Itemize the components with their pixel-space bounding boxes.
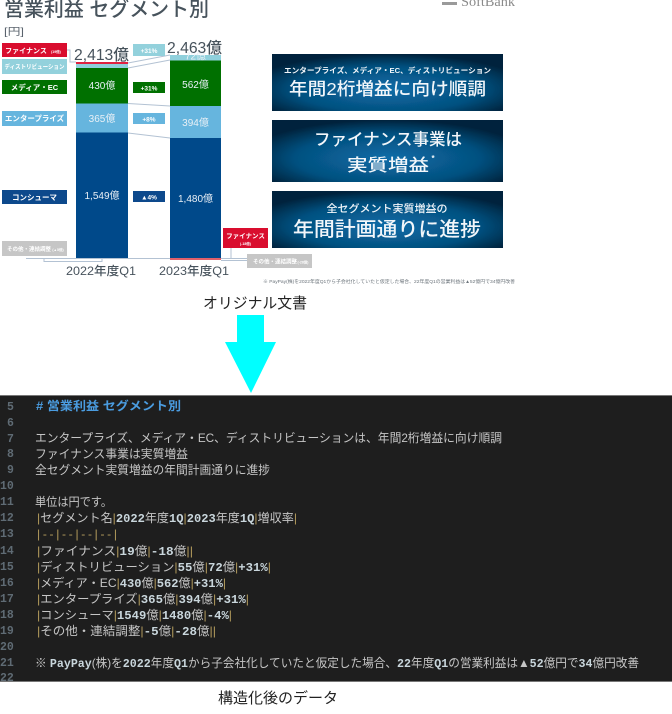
stacked bar: 2022 Q1: 430億	[89, 79, 115, 92]
line numbers: 16	[0, 577, 14, 590]
footnote: ※ PayPay(株)を2022年度Q1から子会社化していたと仮定した場合、22年度Q1の営業利益は▲52億円で34億円改善	[263, 278, 515, 285]
badge: consumer -4%: ▲4%	[141, 194, 157, 202]
banner: finance: *	[431, 154, 435, 163]
markdown table	[37, 510, 297, 639]
line numbers: 21	[0, 657, 14, 670]
stacked bar: 2023 Q1	[170, 50, 221, 260]
banner: finance	[272, 120, 503, 182]
caption: original document: オリジナル文書	[203, 295, 307, 312]
line numbers	[0, 401, 14, 685]
label: media EC	[2, 80, 67, 94]
label: other 2023: その他・連結調整	[253, 258, 297, 266]
change badges	[133, 44, 165, 202]
line numbers: 11	[0, 496, 14, 509]
badge: media +31%	[133, 82, 165, 93]
summary lines: エンタープライズ、メディア・EC、ディストリビューションは、年間2桁増益に向け順調	[35, 430, 502, 445]
markdown table: |その他・連結調整 |-5億|-28億||	[37, 624, 216, 639]
unit note: 単位は円です。	[35, 495, 112, 509]
line numbers: 13	[0, 528, 14, 541]
label: finance: ファイナンス	[5, 47, 47, 55]
label: other	[2, 241, 67, 256]
line numbers: 17	[0, 593, 14, 606]
label: enterprise: エンタープライズ	[5, 113, 65, 123]
label: finance	[2, 43, 67, 57]
line numbers: 5	[7, 401, 14, 414]
banner: on plan: 年間計画通りに進捗	[293, 218, 481, 241]
caption: structured data: 構造化後のデータ	[218, 689, 338, 707]
stacked bar: 2022 Q1	[76, 62, 128, 258]
line numbers: 10	[0, 480, 14, 493]
stacked bar: 2023 Q1: 562億	[182, 78, 209, 91]
line numbers: 19	[0, 625, 14, 638]
markdown table: |コンシューマ|1549億|1480億|-4%|	[37, 608, 232, 623]
code editor panel	[0, 395, 672, 685]
banner: on plan	[272, 191, 503, 248]
label: media EC: メディア・EC	[11, 82, 59, 92]
year labels: 2022年度Q1	[66, 263, 136, 278]
label: finance 2023: ファイナンス	[226, 232, 265, 240]
badge: distribution +31%: +31%	[141, 48, 158, 55]
banner: double-digit growth	[272, 54, 503, 111]
line numbers: 9	[7, 464, 14, 477]
year labels	[66, 263, 229, 278]
label: consumer	[2, 190, 67, 204]
line numbers: 6	[7, 417, 14, 430]
badge: enterprise +8%: +8%	[142, 116, 156, 124]
banner: finance: ファイナンス事業は	[314, 130, 462, 149]
markdown table: |メディア・EC|430億|562億|+31%|	[37, 575, 226, 591]
total 2023: 2,463億	[167, 39, 222, 57]
markdown table: |ファイナンス |19億|-18億||	[37, 544, 193, 559]
label: finance 2023	[223, 228, 268, 248]
label: distribution: ディストリビューション	[4, 63, 64, 71]
code heading: # 営業利益 セグメント別	[36, 398, 181, 413]
segment labels	[2, 43, 67, 256]
banner: finance: 実質増益	[347, 156, 429, 175]
label: other: その他・連結調整	[7, 245, 51, 253]
stacked bar: 2022 Q1: 365億	[89, 112, 115, 125]
original slide	[2, 0, 515, 285]
label: finance: (19億)	[51, 49, 61, 54]
badge: consumer -4%	[133, 191, 165, 202]
year labels: 2023年度Q1	[159, 263, 229, 278]
markdown table: |--|--|--|--|	[37, 527, 117, 541]
markdown table: |エンタープライズ|365億|394億|+31%|	[37, 591, 249, 607]
label: distribution	[2, 59, 67, 74]
label: enterprise	[2, 111, 67, 126]
label: other 2023	[247, 254, 312, 268]
banner: double-digit growth: エンタープライズ、メディア・EC、ディストリビューション	[284, 65, 492, 75]
label: other 2023: (-28億)	[298, 260, 308, 264]
banner: double-digit growth: 年間2桁増益に向け順調	[289, 79, 486, 99]
summary lines	[35, 430, 502, 477]
banner: on plan: 全セグメント実質増益の	[326, 202, 448, 215]
stacked bar: 2023 Q1: 1,480億	[178, 192, 213, 205]
connector lines	[26, 50, 250, 262]
line numbers: 12	[0, 512, 14, 525]
label: finance 2023: (-18億)	[240, 241, 251, 246]
badge: distribution +31%	[133, 44, 165, 56]
line numbers: 20	[0, 641, 14, 654]
markdown table: |ディストリビューション |55億|72億|+31%|	[37, 559, 271, 575]
arrow	[225, 315, 276, 393]
stacked bar: 2022 Q1: 1,549億	[84, 189, 120, 202]
markdown table: |セグメント名|2022年度1Q|2023年度1Q|増収率|	[37, 510, 297, 526]
line numbers: 18	[0, 609, 14, 622]
label: other: (▲5億)	[52, 247, 64, 252]
total 2022: 2,413億	[74, 46, 129, 64]
label: consumer: コンシューマ	[12, 193, 57, 202]
summary lines: 全セグメント実質増益の年間計画通りに進捗	[35, 462, 270, 477]
badge: enterprise +8%	[133, 113, 165, 124]
line numbers: 7	[7, 433, 14, 446]
badge: media +31%: +31%	[141, 86, 158, 92]
stacked bar: 2023 Q1: 394億	[182, 116, 209, 129]
unit label: [円]	[4, 27, 24, 38]
line numbers: 15	[0, 561, 14, 574]
line numbers: 8	[7, 448, 14, 461]
summary lines: ファイナンス事業は実質増益	[35, 446, 188, 461]
code footnote: ※ PayPay(株)を2022年度Q1から子会社化していたと仮定した場合、22年度Q1の営業利益は▲52億円で34億円改善	[35, 655, 639, 671]
stacked bar: 2023 Q1: 72億	[185, 50, 206, 62]
line numbers: 22	[0, 672, 14, 685]
line numbers: 14	[0, 545, 14, 558]
